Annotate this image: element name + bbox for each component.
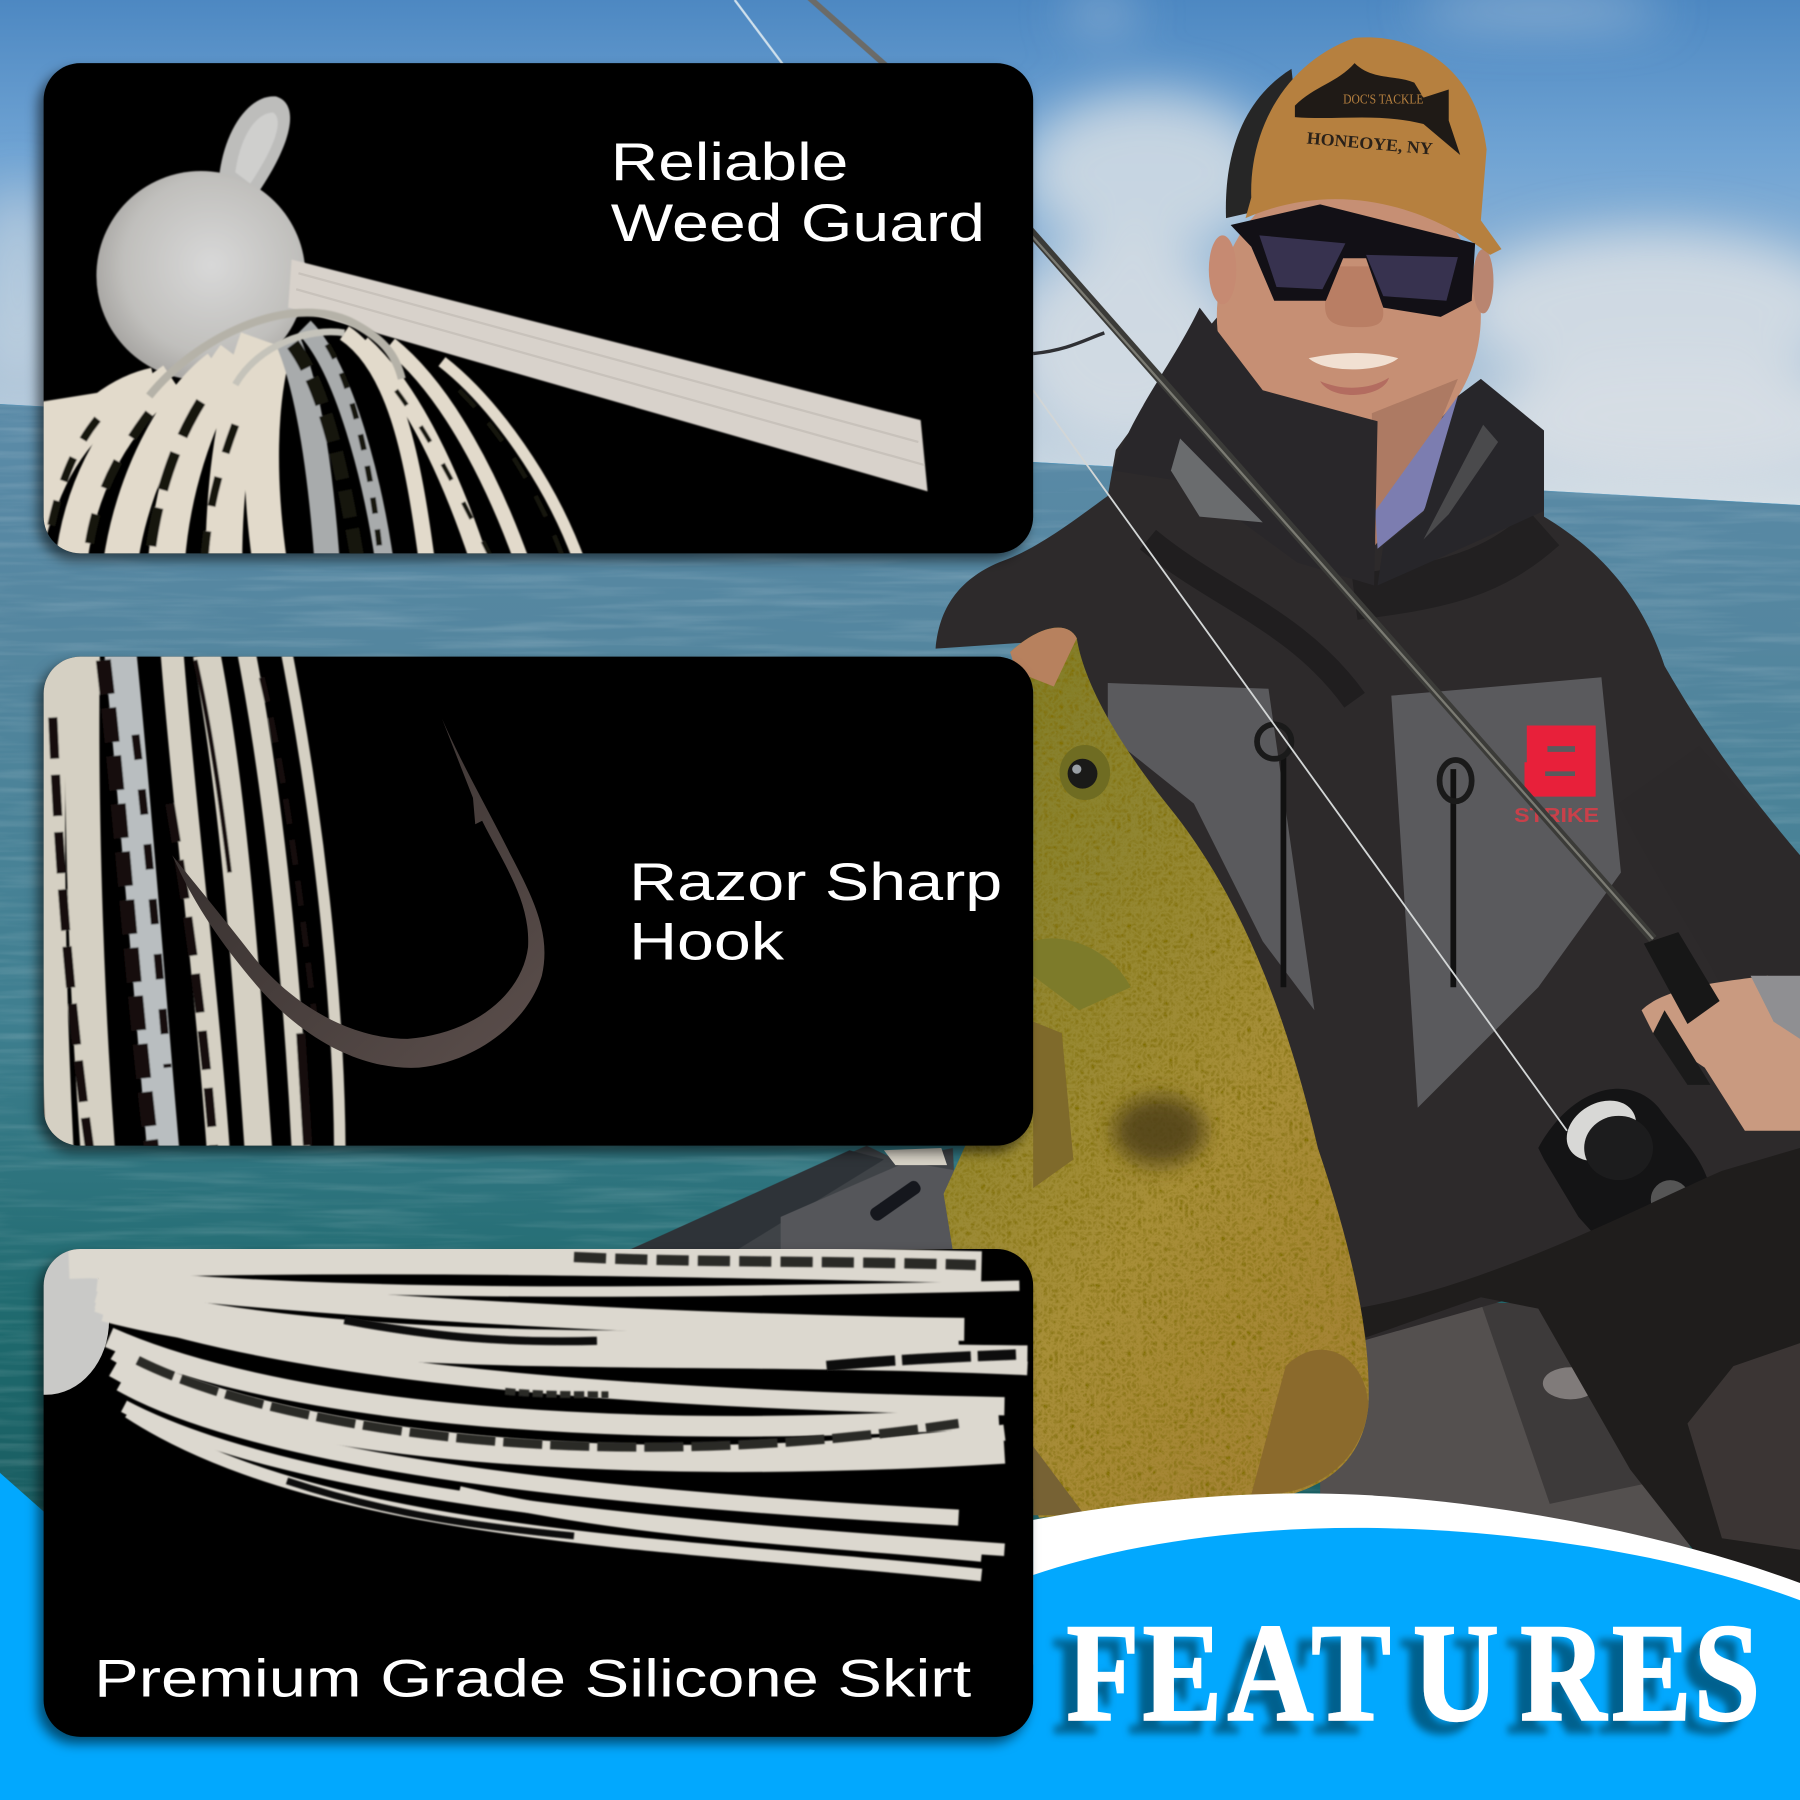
- high collar: [1114, 308, 1378, 585]
- logo: red S on jacket: [1514, 726, 1599, 827]
- hook: [172, 719, 544, 1068]
- logo: red S on jacket: STRIKE: [1514, 804, 1599, 827]
- label: Premium Grade Silicone Skirt: [94, 1650, 972, 1709]
- panel: premium grade silicone skirt: [0, 1246, 1033, 1737]
- weed guard: [288, 259, 928, 491]
- jig photo: head, weed guard and skirt: [41, 96, 928, 562]
- smallmouth bass: [884, 628, 1369, 1518]
- panel: reliable weed guard: [41, 63, 1033, 562]
- label: Hook: [629, 913, 785, 972]
- panel: razor sharp hook: [44, 654, 1033, 1148]
- angler: [936, 37, 1800, 1630]
- skirt strands: [41, 313, 580, 562]
- bottom blue band and white wave: [0, 1473, 1800, 1800]
- cap: DOC'S TACKLE: [1343, 91, 1423, 106]
- skirt strands photo: [0, 1246, 1027, 1575]
- pants: [1355, 1148, 1800, 1630]
- right sleeve, hand and reel: [1538, 746, 1800, 1274]
- cap: [1226, 37, 1502, 255]
- face and neck: [1209, 172, 1493, 545]
- jacket gray panels: [1108, 677, 1621, 1108]
- sunglasses: [1231, 204, 1475, 317]
- boat deck: [626, 1146, 1722, 1630]
- neck gaiter: [1375, 396, 1469, 549]
- jacket: [936, 304, 1800, 1343]
- background water: [0, 404, 1800, 1630]
- main rod: [1026, 230, 1720, 1131]
- background sky with clouds: [0, 0, 1800, 505]
- cap: HONEOYE, NY: [1306, 129, 1434, 159]
- label: Razor Sharp: [629, 853, 1002, 912]
- jacket zippers and pulls: [1148, 528, 1544, 987]
- label: Weed Guard: [611, 194, 985, 253]
- jig head and line tie: [96, 96, 305, 380]
- title: features: FEATURES: [1067, 1596, 1760, 1751]
- label: Reliable: [611, 133, 848, 192]
- fishing rod tip and line at top: [735, 0, 890, 69]
- skirt strands and hook photo: [51, 654, 544, 1148]
